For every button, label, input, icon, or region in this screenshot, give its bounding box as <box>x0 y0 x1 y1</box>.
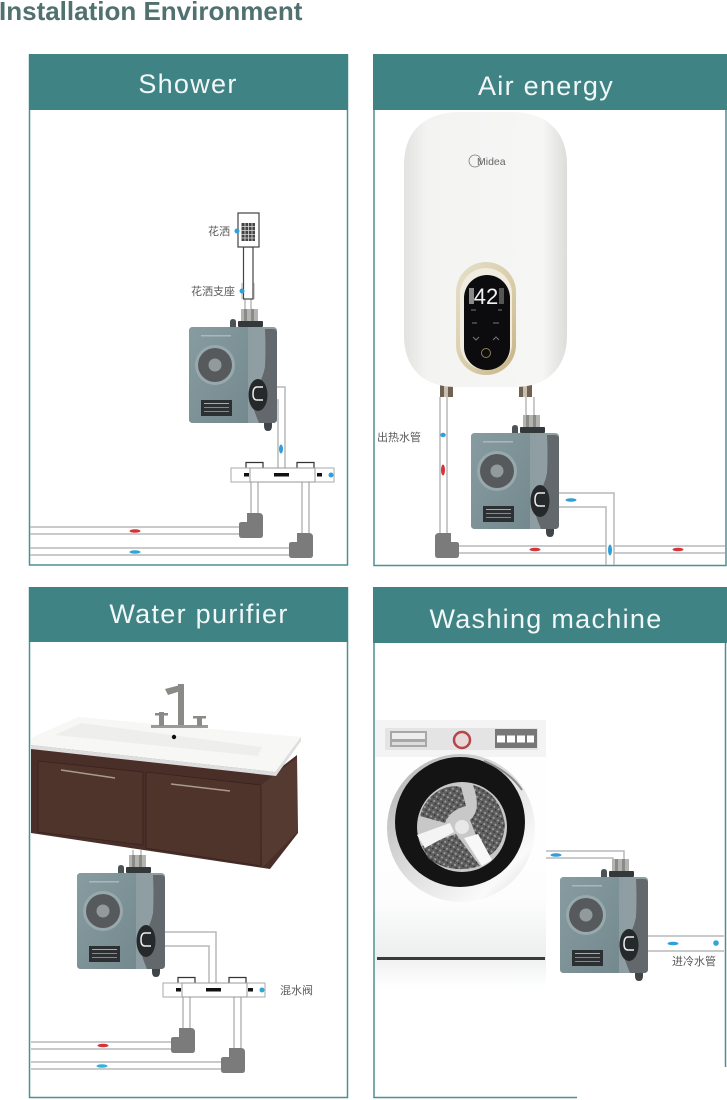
panel: shower <box>29 54 348 565</box>
heading: Water purifier: Water purifier <box>109 599 289 629</box>
header: washing machine <box>373 587 727 643</box>
label: cold water inlet pipe: 进冷水管 <box>672 954 716 968</box>
washing machine <box>375 720 546 988</box>
panel: water purifier <box>29 587 348 1098</box>
washing machine pipes <box>546 851 724 951</box>
heading: Air energy: Air energy <box>478 71 614 101</box>
water heater <box>404 112 567 397</box>
label: shower support: 花洒支座 <box>191 284 235 298</box>
elbows <box>171 1028 245 1073</box>
pump: washing machine <box>560 859 648 981</box>
header: air energy <box>373 54 727 110</box>
pump: air energy <box>471 415 559 537</box>
pump: water purifier <box>77 855 165 977</box>
control panel <box>375 720 546 757</box>
flow arrows <box>550 853 719 946</box>
elbow <box>435 533 459 558</box>
flow arrows <box>440 433 684 556</box>
heading: Shower: Shower <box>138 69 238 99</box>
header: shower <box>29 54 348 110</box>
heading: Washing machine: Washing machine <box>429 604 663 634</box>
air pipes <box>440 397 725 565</box>
logo: Midea: Midea <box>477 156 506 168</box>
panel: washing machine <box>373 587 727 1098</box>
flow arrows <box>130 444 334 554</box>
sink top <box>31 717 301 772</box>
pump: shower <box>189 309 277 431</box>
door <box>387 754 535 902</box>
panel buttons <box>471 310 502 358</box>
elbows <box>239 513 313 558</box>
header: water purifier <box>29 587 348 642</box>
sink cabinet <box>31 684 301 869</box>
flow arrows <box>96 1044 108 1068</box>
label: mixing valve: 混水阀 <box>280 983 313 997</box>
marker dots <box>234 228 244 294</box>
temperature reading: 42 <box>474 284 498 309</box>
faucet <box>151 684 208 728</box>
icon: shower head <box>238 213 259 299</box>
shower pipes <box>30 299 309 555</box>
mixing valve <box>163 978 265 997</box>
label: hot water outlet pipe: 出热水管 <box>377 430 421 444</box>
water purifier pipes <box>31 850 241 1069</box>
panel: air energy <box>373 54 727 566</box>
control panel <box>456 262 516 375</box>
label: shower head: 花洒 <box>208 225 230 238</box>
mixing valve <box>231 462 334 482</box>
